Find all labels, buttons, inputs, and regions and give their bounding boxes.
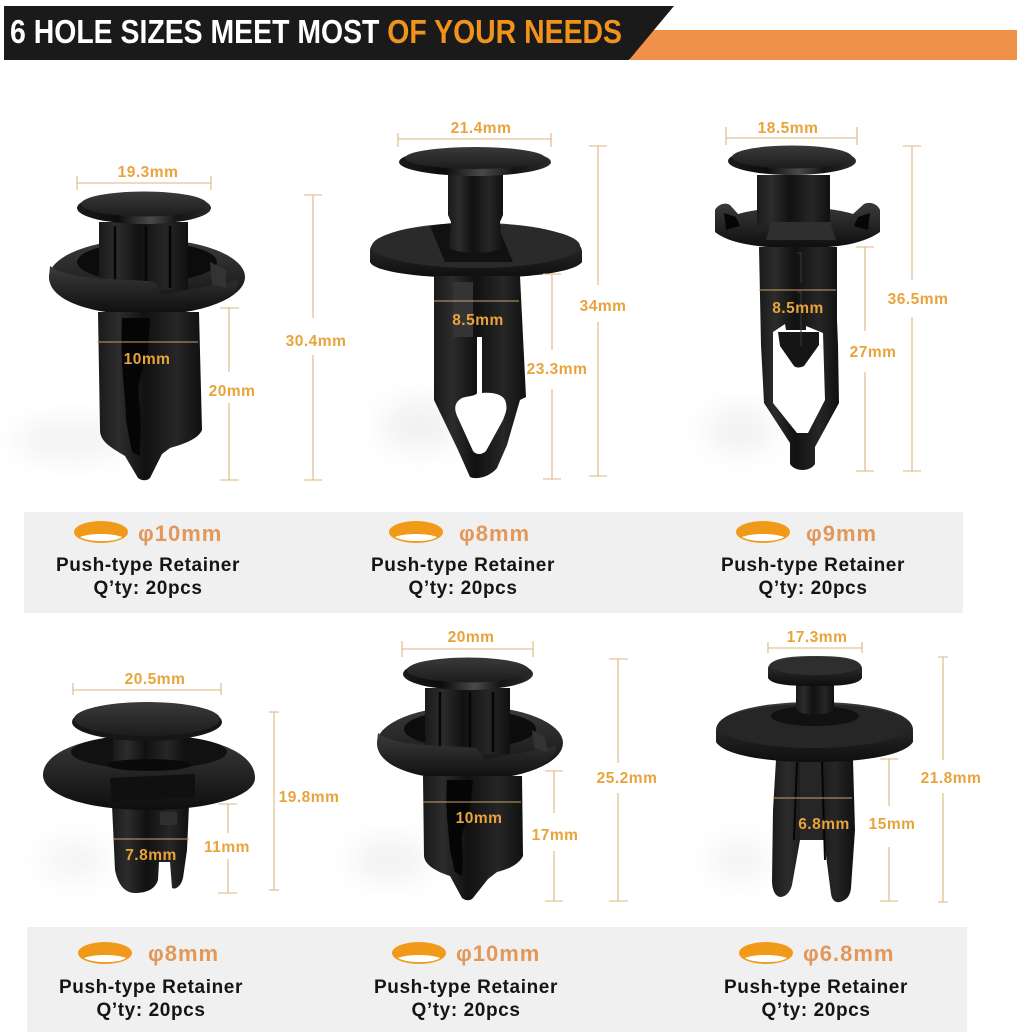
retainer name: Push-type Retainer (724, 977, 908, 998)
dimension labels: 10mm (124, 351, 170, 368)
retainer name: Push-type Retainer (59, 977, 243, 998)
icon: hole oval (739, 942, 793, 964)
dimension labels: 17mm (532, 827, 578, 844)
dimension labels: 18.5mm (758, 120, 818, 137)
dimension lines (768, 642, 948, 902)
dimension labels: 19.8mm (279, 789, 339, 806)
bar background (27, 927, 967, 1032)
clip drawing (40, 702, 255, 893)
dimension labels: 36.5mm (888, 291, 948, 308)
hole size: φ8mm (459, 521, 530, 546)
dimension lines (402, 641, 628, 901)
info bar: bottom row (27, 927, 967, 1032)
clip drawing (370, 147, 582, 478)
dimension labels: 8.5mm (772, 300, 824, 317)
icon: hole oval (74, 521, 128, 543)
clip drawing (710, 656, 913, 902)
dimension labels: 21.8mm (921, 770, 981, 787)
dimension labels: 10mm (456, 810, 502, 827)
black header panel (4, 6, 674, 60)
dimension lines (398, 133, 607, 479)
product: 8mm retainer, 34mm long (370, 120, 626, 479)
icon: hole oval (736, 521, 790, 543)
column 3 info (721, 521, 905, 599)
clip drawing (15, 192, 245, 480)
hole size: φ6.8mm (803, 941, 894, 966)
dimension lines (73, 683, 279, 893)
dimension labels (125, 671, 339, 864)
dimension labels: 15mm (869, 816, 915, 833)
hole size: φ8mm (148, 941, 219, 966)
dimension labels (118, 164, 346, 400)
quantity: Q’ty: 20pcs (96, 1000, 206, 1021)
dimension labels (758, 120, 948, 361)
clip drawing (705, 146, 880, 470)
column 2 info (371, 521, 555, 599)
orange header strip (630, 30, 1017, 60)
clip drawing (350, 658, 563, 900)
dimension labels (451, 120, 626, 378)
dimension labels: 7.8mm (125, 847, 177, 864)
retainer name: Push-type Retainer (721, 555, 905, 576)
header banner (4, 6, 1017, 60)
quantity: Q’ty: 20pcs (408, 578, 518, 599)
dimension labels: 30.4mm (286, 333, 346, 350)
icon: hole oval (389, 521, 443, 543)
dimension labels (448, 629, 657, 844)
quantity: Q’ty: 20pcs (411, 1000, 521, 1021)
column 3 info (724, 941, 908, 1021)
column 1 info (56, 521, 240, 599)
dimension labels: 34mm (580, 298, 626, 315)
dimension labels (787, 629, 981, 833)
dimension labels: 6.8mm (798, 816, 850, 833)
product: 8mm retainer, 19.8mm long (40, 671, 339, 893)
product: 10mm retainer, 30.4mm long (15, 164, 346, 480)
dimension labels: 19.3mm (118, 164, 178, 181)
dimension labels: 20mm (209, 383, 255, 400)
hole size: φ10mm (138, 521, 222, 546)
dimension labels: 25.2mm (597, 770, 657, 787)
dimension labels: 11mm (204, 839, 250, 856)
retainer name: Push-type Retainer (56, 555, 240, 576)
dimension lines (726, 127, 921, 471)
dimension labels: 17.3mm (787, 629, 847, 646)
dimension lines (77, 176, 322, 480)
icon: hole oval (78, 942, 132, 964)
hole size: φ9mm (806, 521, 877, 546)
dimension labels: 27mm (850, 344, 896, 361)
column 1 info (59, 941, 243, 1021)
column 2 info (374, 941, 558, 1021)
product: 6.8mm retainer, 21.8mm long (710, 629, 981, 902)
bar background (24, 512, 963, 613)
hole size: φ10mm (456, 941, 540, 966)
retainer name: Push-type Retainer (371, 555, 555, 576)
dimension labels: 20.5mm (125, 671, 185, 688)
quantity: Q’ty: 20pcs (761, 1000, 871, 1021)
dimension labels: 21.4mm (451, 120, 511, 137)
quantity: Q’ty: 20pcs (93, 578, 203, 599)
info bar: top row (24, 512, 963, 613)
retainer name: Push-type Retainer (374, 977, 558, 998)
icon: hole oval (392, 942, 446, 964)
product: 9mm retainer, 36.5mm long (705, 120, 948, 471)
title: 6 HOLE SIZES MEET MOST OF YOUR NEEDS (10, 13, 622, 50)
product: 10mm retainer, 25.2mm long (350, 629, 657, 901)
quantity: Q’ty: 20pcs (758, 578, 868, 599)
dimension labels: 20mm (448, 629, 494, 646)
dimension labels: 23.3mm (527, 361, 587, 378)
dimension labels: 8.5mm (452, 312, 504, 329)
